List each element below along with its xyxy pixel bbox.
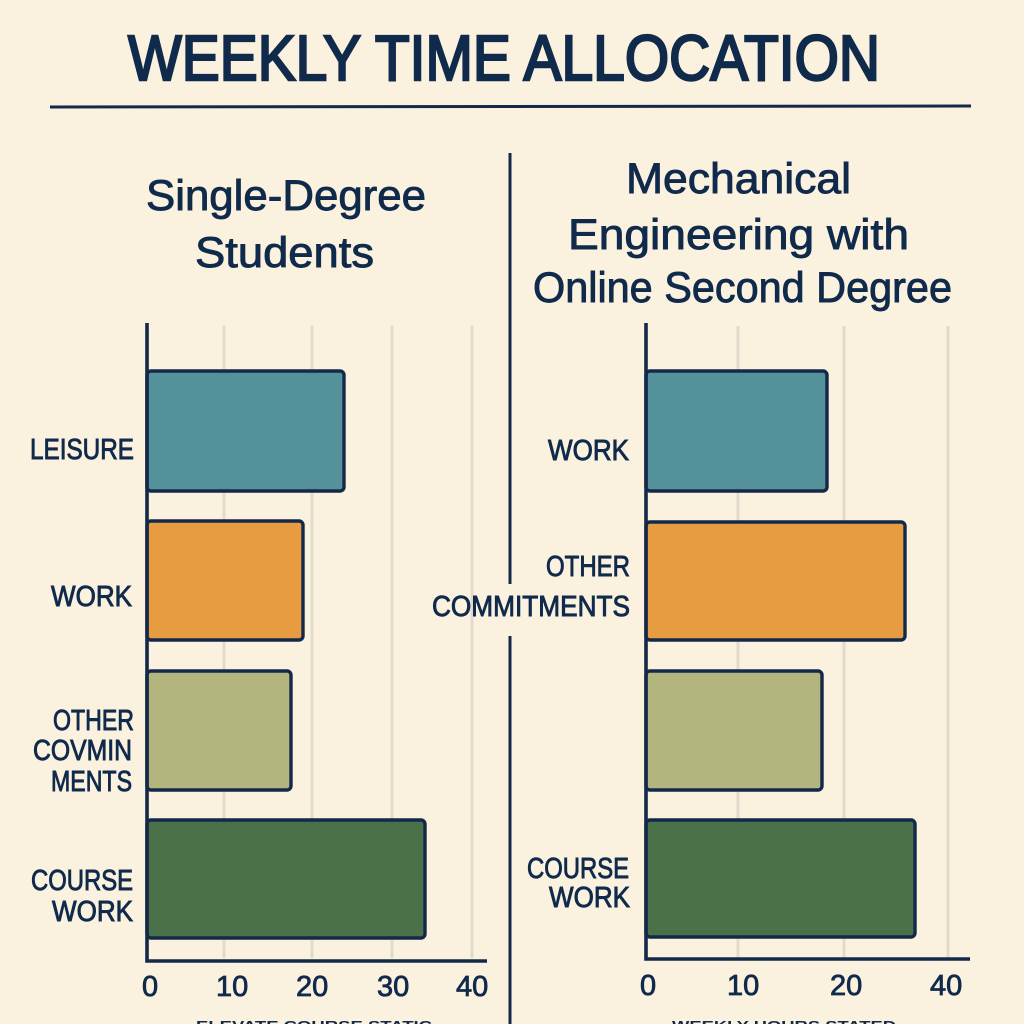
category labels: OTHER xyxy=(53,705,134,737)
x axis numbers: 20 xyxy=(296,971,328,1003)
axes xyxy=(147,323,487,961)
heading: single-degree students xyxy=(146,172,426,277)
bar: other commitments xyxy=(147,671,291,790)
heading: single-degree students: Single-Degree xyxy=(146,172,426,220)
category labels xyxy=(432,435,631,914)
category labels: WORK xyxy=(549,882,631,914)
central divider xyxy=(508,153,512,1024)
gridlines xyxy=(224,326,472,958)
category labels: WORK xyxy=(548,435,630,467)
heading: mechanical engineering with online second degree: Online Second Degree xyxy=(533,264,952,312)
gridlines xyxy=(738,326,948,958)
bar: leisure xyxy=(147,371,344,491)
category labels: WORK xyxy=(52,896,134,928)
bar: other commitments xyxy=(646,522,905,640)
x axis numbers: 30 xyxy=(377,971,409,1003)
panel: single-degree students xyxy=(30,172,488,1024)
category labels: WORK xyxy=(51,581,133,613)
x axis numbers: 0 xyxy=(640,970,656,1002)
heading: mechanical engineering with online second degree: Mechanical xyxy=(626,155,851,203)
heading: single-degree students: Students xyxy=(195,229,374,277)
x axis numbers: 0 xyxy=(142,971,158,1003)
bars xyxy=(646,371,915,937)
bar: work xyxy=(646,371,827,491)
category labels: MENTS xyxy=(51,766,132,798)
x axis numbers xyxy=(640,970,962,1002)
category labels: COMMITMENTS xyxy=(432,591,630,623)
category labels: COVMIN xyxy=(33,735,132,767)
bar: work xyxy=(147,521,303,640)
heading: mechanical engineering with online second degree: Engineering with xyxy=(568,211,909,259)
axes xyxy=(646,323,970,959)
bars xyxy=(147,371,425,938)
panel: mechanical engineering with online second degree xyxy=(432,155,970,1024)
title rule xyxy=(50,106,971,107)
x axis numbers xyxy=(142,971,488,1003)
bar: course work xyxy=(646,820,915,937)
x axis numbers: 40 xyxy=(930,970,962,1002)
x axis numbers: 40 xyxy=(456,971,488,1003)
heading: mechanical engineering with online second degree xyxy=(533,155,952,312)
x axis numbers: 10 xyxy=(216,971,248,1003)
category labels: COURSE xyxy=(31,865,133,897)
bar: unlabelled xyxy=(646,671,822,790)
category labels: COURSE xyxy=(527,853,629,885)
x axis numbers: 20 xyxy=(830,970,862,1002)
title: WEEKLY TIME ALLOCATION xyxy=(128,22,880,94)
x axis numbers: 10 xyxy=(727,970,759,1002)
bar: course work xyxy=(147,820,425,938)
category labels xyxy=(30,434,134,928)
category labels: OTHER xyxy=(546,551,630,583)
category labels: LEISURE xyxy=(30,434,134,466)
